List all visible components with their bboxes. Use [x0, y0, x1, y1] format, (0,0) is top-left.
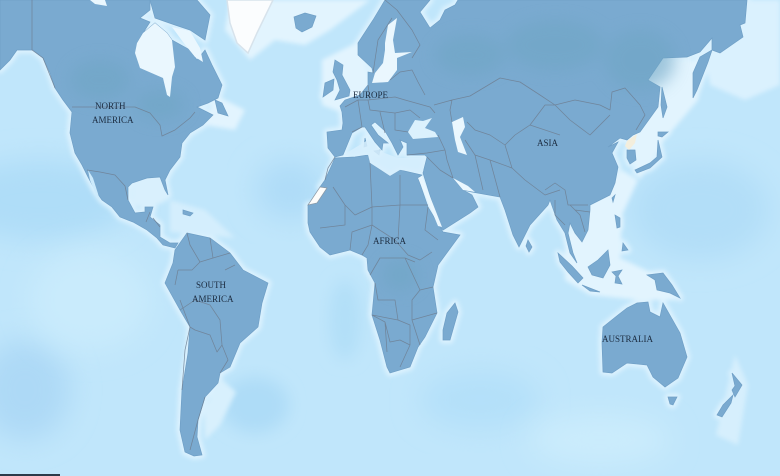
label: North America second line: AMERICA	[92, 115, 134, 125]
Mediterranean tint	[343, 140, 425, 176]
label: Africa: AFRICA	[373, 236, 407, 246]
label: Asia: ASIA	[537, 138, 559, 148]
label: South America second line: AMERICA	[192, 294, 234, 304]
label: North America: NORTH	[95, 101, 126, 111]
bottom edge mark	[0, 474, 60, 476]
label: Europe: EUROPE	[353, 90, 389, 100]
label: Australia: AUSTRALIA	[602, 334, 653, 344]
Greenland	[227, 0, 273, 53]
Western Sahara	[308, 187, 327, 205]
inland and enclosed seas	[88, 0, 475, 227]
terrain shading	[70, 20, 675, 291]
label: South America: SOUTH	[196, 280, 227, 290]
country borders	[32, 0, 645, 450]
ocean depth shading	[0, 160, 770, 465]
North Korea	[625, 134, 637, 150]
